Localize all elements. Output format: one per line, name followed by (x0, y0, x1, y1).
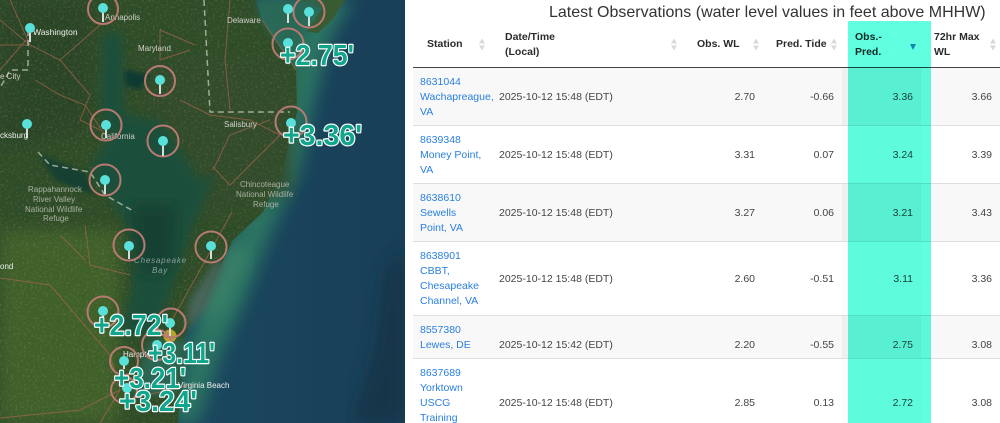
header: observed water level: Obs. WL (697, 38, 740, 50)
predicted tide column (810, 91, 834, 409)
station links: 8639348 (420, 134, 461, 146)
header: station: Station (427, 38, 463, 50)
station links: Yorktown (420, 382, 463, 394)
roads (0, 0, 296, 423)
72 hour max column (972, 91, 992, 409)
date column: 2025-10-12 15:48 (EDT) (499, 149, 613, 161)
observed water level column: 3.27 (735, 207, 755, 219)
place labels: Refuge (43, 214, 69, 223)
place labels: Maryland (138, 44, 171, 53)
water level callouts: +3.11' (148, 338, 215, 370)
place labels: Salisbury (224, 120, 257, 129)
station links: 8637689 (420, 367, 461, 379)
station links: 8638610 (420, 192, 461, 204)
station links: VA (420, 106, 433, 118)
predicted tide column: 0.06 (814, 207, 834, 219)
date column: 2025-10-12 15:48 (EDT) (499, 273, 613, 285)
difference column: 2.72 (893, 397, 913, 409)
station links: 8557380 (420, 324, 461, 336)
station links: USCG (420, 397, 450, 409)
date column (499, 91, 613, 409)
predicted tide column: 0.07 (814, 149, 834, 161)
place labels: Virginia Beach (178, 381, 229, 390)
station links: Money Point, (420, 149, 481, 161)
row: Sewells Point (413, 184, 1000, 242)
table header (413, 22, 1000, 68)
station links: Point, VA (420, 222, 463, 234)
place labels: cksburg (0, 131, 28, 140)
header: max: WL (934, 46, 950, 58)
72 hour max column: 3.39 (972, 149, 992, 161)
station links: CBBT, (420, 265, 450, 277)
station links: Sewells (420, 207, 456, 219)
New Jersey cape (296, 0, 345, 33)
sorted column shading (842, 68, 921, 358)
satellite map panel (0, 0, 405, 423)
water level callouts: +3.24' (119, 386, 197, 418)
station links: Channel, VA (420, 295, 478, 307)
predicted tide column: -0.55 (810, 339, 834, 351)
place labels: National Wildlife (236, 190, 294, 199)
date column: 2025-10-12 15:42 (EDT) (499, 339, 613, 351)
highlight band on difference column (848, 21, 931, 423)
coastal shallows (170, 0, 352, 423)
place labels: National Wildlife (25, 205, 83, 214)
72 hour max column: 3.08 (972, 339, 992, 351)
header: difference: Obs.- (855, 31, 882, 43)
difference column: 3.24 (893, 149, 913, 161)
row: CBBT (413, 242, 1000, 316)
place labels: River Valley (33, 195, 75, 204)
difference column: 2.75 (893, 339, 913, 351)
difference column: 3.21 (893, 207, 913, 219)
land speckle (0, 0, 297, 423)
place labels: ond (0, 262, 13, 271)
land mass (0, 0, 297, 423)
sort arrow active (910, 44, 916, 50)
place labels: Chesapeake (134, 256, 187, 265)
date column: 2025-10-12 15:48 (EDT) (499, 397, 613, 409)
row: Wachapreague (413, 68, 1000, 126)
station rings (88, 0, 324, 403)
place labels: Bay (152, 266, 168, 275)
Delaware Bay water (256, 0, 322, 60)
station links: Chesapeake (420, 280, 479, 292)
observed water level column: 3.31 (735, 149, 755, 161)
station links (420, 76, 494, 423)
header: max (934, 31, 980, 58)
header: date: Date/Time (505, 31, 555, 43)
place labels: Washington (33, 27, 78, 37)
highlighted location dot (164, 330, 176, 342)
date column: 2025-10-12 15:48 (EDT) (499, 91, 613, 103)
place labels: Chincoteague (240, 180, 290, 189)
row: Lewes (413, 316, 1000, 359)
water level callouts (94, 40, 362, 418)
state borders (0, 0, 290, 212)
place labels: Annapolis (105, 13, 140, 22)
Chesapeake Bay water (90, 30, 215, 335)
observed water level column (735, 91, 755, 409)
header: max: 72hr Max (934, 31, 980, 43)
date column: 2025-10-12 15:48 (EDT) (499, 207, 613, 219)
place labels (0, 13, 294, 390)
row: Money Point (413, 126, 1000, 184)
table title: Latest Observations (water level values in feet above MHHW) (549, 4, 986, 21)
barrier lagoon (185, 262, 225, 330)
place labels: Hampton (123, 350, 155, 359)
72 hour max column: 3.43 (972, 207, 992, 219)
header: difference: Pred. (855, 46, 881, 58)
predicted tide column: -0.51 (810, 273, 834, 285)
place labels: e City (0, 72, 20, 81)
place labels: California (101, 132, 135, 141)
place labels: Refuge (253, 200, 279, 209)
station links: Lewes, DE (420, 339, 471, 351)
header: date (505, 31, 555, 58)
water level callouts: +2.72' (94, 310, 168, 342)
predicted tide column: 0.13 (814, 397, 834, 409)
72 hour max column: 3.36 (972, 273, 992, 285)
station links: 8638901 (420, 250, 461, 262)
predicted tide column: -0.66 (810, 91, 834, 103)
header: difference (855, 31, 882, 58)
place labels: Delaware (227, 16, 261, 25)
station links: VA (420, 164, 433, 176)
difference column: 3.36 (893, 91, 913, 103)
water level callouts: +2.75' (280, 40, 354, 72)
sort icons (479, 38, 996, 50)
water level callouts: +3.21' (114, 363, 186, 395)
place labels: Rappahannock (28, 185, 83, 194)
observed water level column: 2.85 (735, 397, 755, 409)
72 hour max column: 3.08 (972, 397, 992, 409)
header: predicted tide: Pred. Tide (776, 38, 827, 50)
observations table panel (405, 0, 1000, 423)
72 hour max column: 3.66 (972, 91, 992, 103)
observed water level column: 2.20 (735, 339, 755, 351)
water level callouts: +3.36' (283, 120, 362, 152)
difference column (893, 91, 913, 409)
station links: Wachapreague, (420, 91, 494, 103)
station links: 8631044 (420, 76, 461, 88)
difference column: 3.11 (893, 273, 913, 285)
station pins (27, 9, 309, 394)
observed water level column: 2.60 (735, 273, 755, 285)
observed water level column: 2.70 (735, 91, 755, 103)
header: date: (Local) (505, 46, 539, 58)
